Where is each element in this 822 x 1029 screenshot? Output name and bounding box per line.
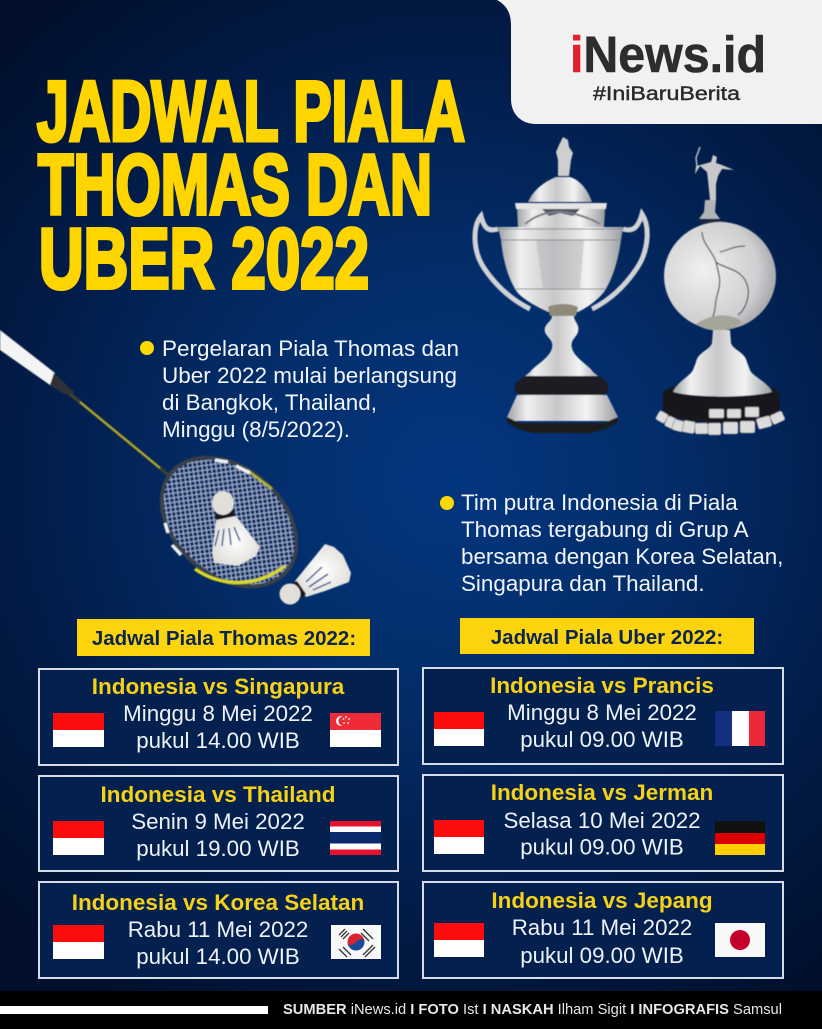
panel: Indonesia vs Prancis: Indonesia vs Prancis [490, 673, 714, 698]
finial [556, 137, 573, 176]
panel: Indonesia vs Prancis [423, 668, 783, 764]
panel: Indonesia vs Jerman: pukul 09.00 WIB [520, 834, 684, 860]
credits: SUMBER iNews.id I FOTO Ist I NASKAH Ilham Sigit I INFOGRAFIS Samsul [283, 1002, 782, 1018]
heading: Uber schedule: Jadwal Piala Uber 2022: [491, 626, 723, 649]
pedestal [699, 200, 720, 219]
logo wordmark: iNews.id [570, 26, 766, 83]
logo panel [497, 0, 822, 124]
text block: opening [140, 336, 459, 442]
panel: Indonesia vs Prancis: Minggu 8 Mei 2022 [507, 700, 697, 725]
panel: Indonesia vs Thailand [39, 776, 398, 871]
text block: group A: bersama dengan Korea Selatan, [461, 544, 783, 569]
panel: Indonesia vs Jepang: pukul 09.00 WIB [520, 943, 684, 968]
flag: Indonesia [434, 923, 484, 957]
flag: Indonesia [434, 712, 484, 746]
bullet [440, 496, 454, 510]
flag: Japan [715, 923, 765, 957]
panel: Indonesia vs Jerman [423, 775, 783, 871]
title: JADWAL PIALA [37, 64, 465, 160]
grip [0, 330, 55, 385]
text block: group A: Thomas tergabung di Grup A [461, 517, 749, 542]
panel: Indonesia vs Prancis: pukul 09.00 WIB [520, 727, 684, 752]
panel: Indonesia vs Jepang: Rabu 11 Mei 2022 [512, 915, 692, 940]
text block: opening: di Bangkok, Thailand, [162, 390, 377, 415]
heading: Uber schedule [460, 618, 754, 654]
player figure [695, 155, 734, 200]
panel: Indonesia vs Jepang [423, 882, 783, 978]
globe [664, 222, 776, 330]
panel: Indonesia vs Jerman: Selasa 10 Mei 2022 [503, 808, 701, 833]
text block: opening: Uber 2022 mulai berlangsung [162, 363, 457, 388]
footer bar [0, 991, 822, 1029]
text block: group A [440, 490, 783, 596]
trophy: Thomas Cup [475, 137, 647, 433]
trophy: Uber Cup [655, 147, 785, 435]
panel: Indonesia vs Korea Selatan: pukul 14.00 WIB [136, 944, 300, 969]
meridian arc [700, 221, 770, 262]
panel: Indonesia vs Korea Selatan: Rabu 11 Mei 2022 [128, 917, 308, 942]
panel: Indonesia vs Thailand: Indonesia vs Thailand [100, 782, 336, 807]
stem and silver foot [673, 330, 772, 396]
heading: Thomas schedule: Jadwal Piala Thomas 2022: [92, 627, 356, 650]
text block: opening: Minggu (8/5/2022). [162, 417, 350, 442]
racket [0, 330, 322, 613]
panel: Indonesia vs Korea Selatan [39, 882, 398, 978]
logo wordmark: #IniBaruBerita [593, 84, 741, 105]
panel: Indonesia vs Singapura [39, 669, 398, 765]
continents [702, 232, 748, 318]
bowl [498, 227, 623, 312]
panel: Indonesia vs Singapura: Indonesia vs Singapura [92, 674, 345, 699]
logo wordmark [570, 26, 766, 105]
flag: Thailand [330, 821, 381, 855]
title: THOMAS DAN [38, 138, 432, 233]
panel: Indonesia vs Singapura: pukul 14.00 WIB [136, 728, 300, 753]
panel: Indonesia vs Korea Selatan: Indonesia vs Korea Selatan [72, 890, 364, 915]
head [139, 434, 319, 610]
title: UBER 2022 [39, 212, 369, 307]
text block: group A: Singapura dan Thailand. [461, 571, 705, 596]
title [37, 64, 465, 307]
flag: Singapore [330, 713, 381, 747]
bullet [140, 341, 154, 355]
flag: Indonesia [53, 713, 104, 747]
flag: France [715, 711, 765, 746]
panel: Indonesia vs Thailand: Senin 9 Mei 2022 [131, 809, 305, 834]
panel: Indonesia vs Thailand: pukul 19.00 WIB [136, 836, 300, 861]
stem and foot [520, 316, 603, 380]
shaft [70, 394, 172, 478]
handles [475, 216, 530, 309]
shuttlecock on racket [212, 491, 260, 566]
panel: Indonesia vs Jerman: Indonesia vs Jerman [491, 780, 713, 805]
flag: South Korea [331, 925, 381, 959]
flag: Indonesia [53, 821, 104, 855]
panel: Indonesia vs Jepang: Indonesia vs Jepang [491, 888, 713, 913]
black base [663, 387, 780, 423]
shuttlecock on ground [280, 544, 351, 604]
text block: group A: Tim putra Indonesia di Piala [461, 490, 738, 515]
panel: Indonesia vs Singapura: Minggu 8 Mei 2022 [123, 701, 313, 726]
flag: Indonesia [434, 820, 484, 854]
flag: Indonesia [53, 925, 104, 959]
text block: opening: Pergelaran Piala Thomas dan [162, 336, 459, 361]
plaques [655, 407, 785, 435]
lid [528, 177, 592, 202]
heading: Thomas schedule [77, 619, 370, 656]
flag: Germany [715, 821, 765, 855]
